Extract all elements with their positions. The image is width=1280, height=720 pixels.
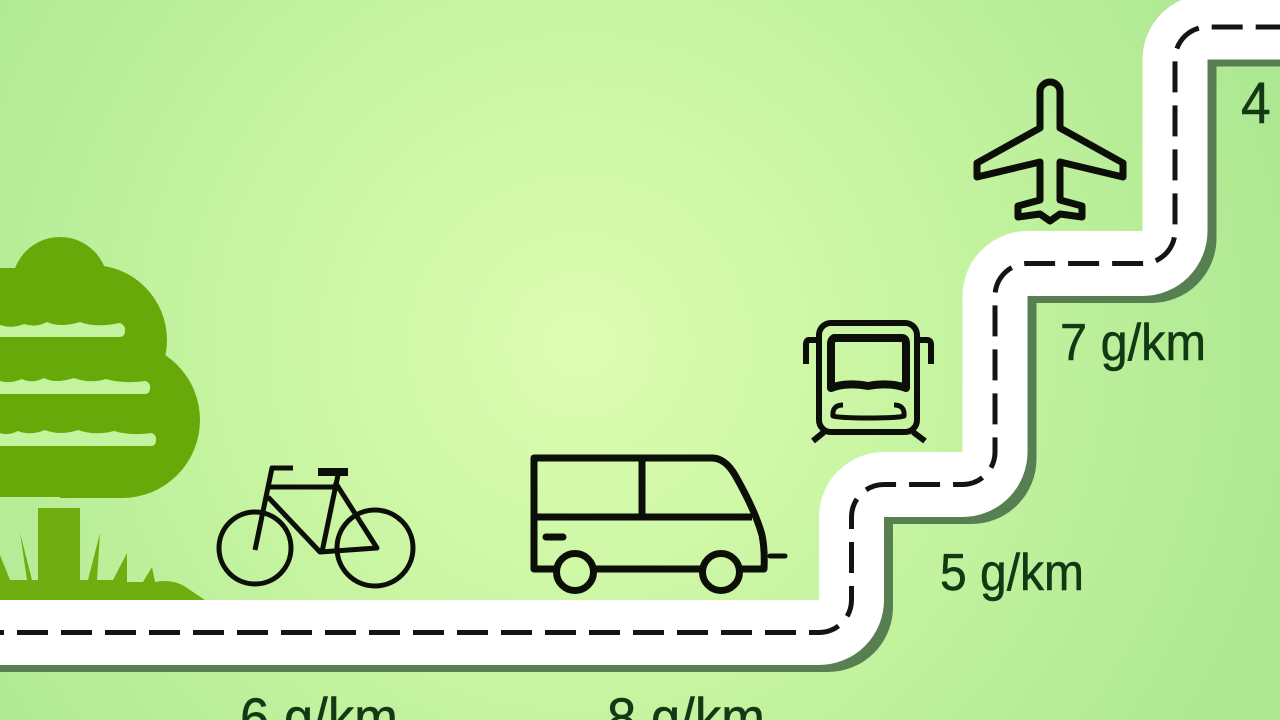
icon: bus <box>806 323 931 441</box>
label: bus emissions: 5 g/km <box>940 544 1084 602</box>
icon: bicycle <box>219 468 413 586</box>
icon: airplane <box>977 82 1123 221</box>
label: airplane emissions: 7 g/km <box>1060 314 1206 372</box>
icon: tree <box>0 237 205 600</box>
icon: van <box>534 458 785 590</box>
